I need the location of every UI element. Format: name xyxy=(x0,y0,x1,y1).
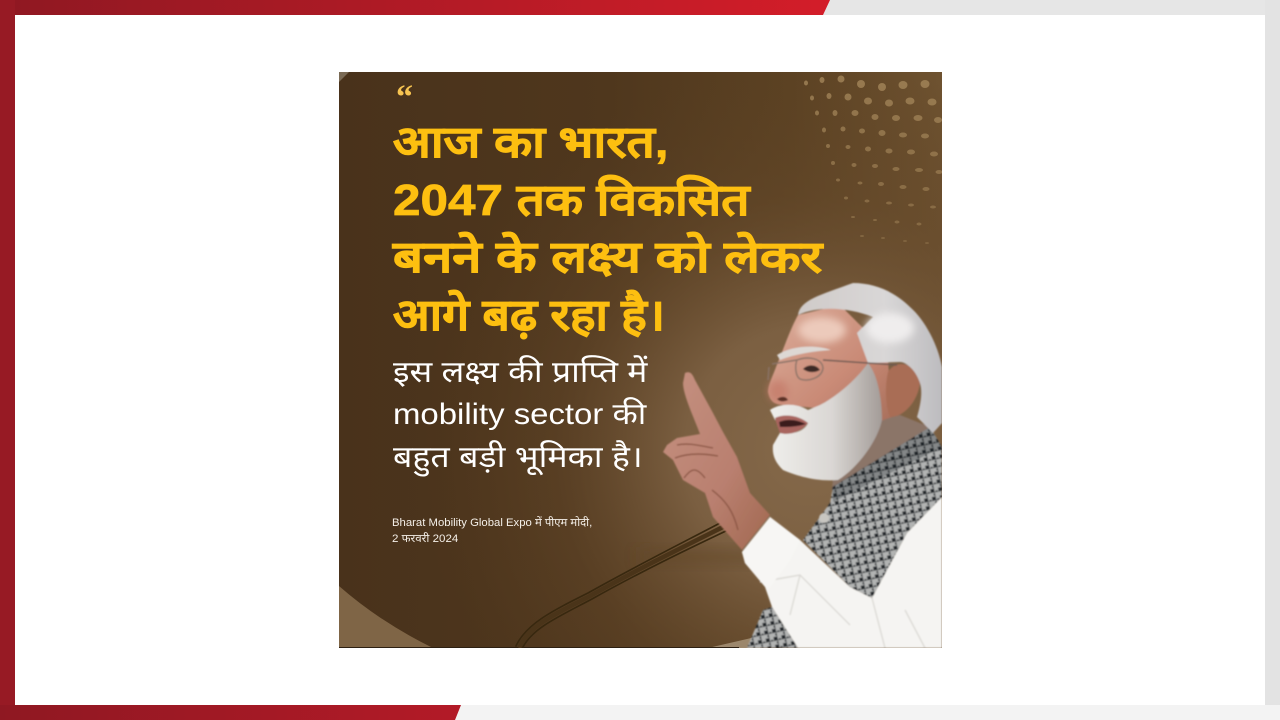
eye xyxy=(803,365,820,372)
body text: इस लक्ष्य की प्राप्ति में xyxy=(393,356,647,389)
bottom wedge near sleeve xyxy=(708,636,760,648)
vest lower panel xyxy=(747,607,798,648)
attribution xyxy=(392,516,592,545)
vest body xyxy=(803,427,942,598)
white shirt and sleeve xyxy=(742,497,942,648)
body text: mobility sector की xyxy=(393,398,646,431)
ear xyxy=(886,364,920,417)
heading: आज का भारत, xyxy=(393,118,669,167)
portrait xyxy=(663,283,942,648)
desk band behind microphone xyxy=(640,552,780,562)
attribution: Bharat Mobility Global Expo में पीएम मोदी, xyxy=(392,517,592,529)
microphone stems xyxy=(516,522,728,647)
hair xyxy=(798,283,942,433)
body text xyxy=(393,355,648,476)
eyebrow xyxy=(777,347,831,360)
finger creases xyxy=(675,444,738,530)
attribution: 2 फरवरी 2024 xyxy=(392,533,458,545)
nostril xyxy=(777,397,788,401)
heading: 2047 तक विकसित xyxy=(393,176,749,225)
body text: बहुत बड़ी भूमिका है। xyxy=(393,441,643,474)
corner highlight xyxy=(339,72,349,82)
bottom-left light corner wedge xyxy=(339,586,433,648)
dot pattern xyxy=(804,76,942,244)
heading xyxy=(392,118,824,340)
heading: आगे बढ़ रहा है। xyxy=(393,291,665,340)
face xyxy=(768,305,892,422)
shirt cuff xyxy=(742,517,800,590)
bottom edge line xyxy=(339,647,739,648)
beard xyxy=(770,363,882,480)
nose shading xyxy=(768,380,788,402)
heading: बनने के लक्ष्य को लेकर xyxy=(393,233,822,282)
vest collar xyxy=(832,427,942,502)
quotation mark: “ xyxy=(396,79,413,116)
hair highlight xyxy=(866,313,914,343)
vest button xyxy=(819,513,829,523)
photo panel: brown background with portrait xyxy=(339,72,942,648)
glasses xyxy=(768,358,897,380)
mouth xyxy=(775,416,808,434)
raised hand xyxy=(663,372,770,550)
forehead highlight xyxy=(798,317,846,343)
neck xyxy=(832,415,930,490)
